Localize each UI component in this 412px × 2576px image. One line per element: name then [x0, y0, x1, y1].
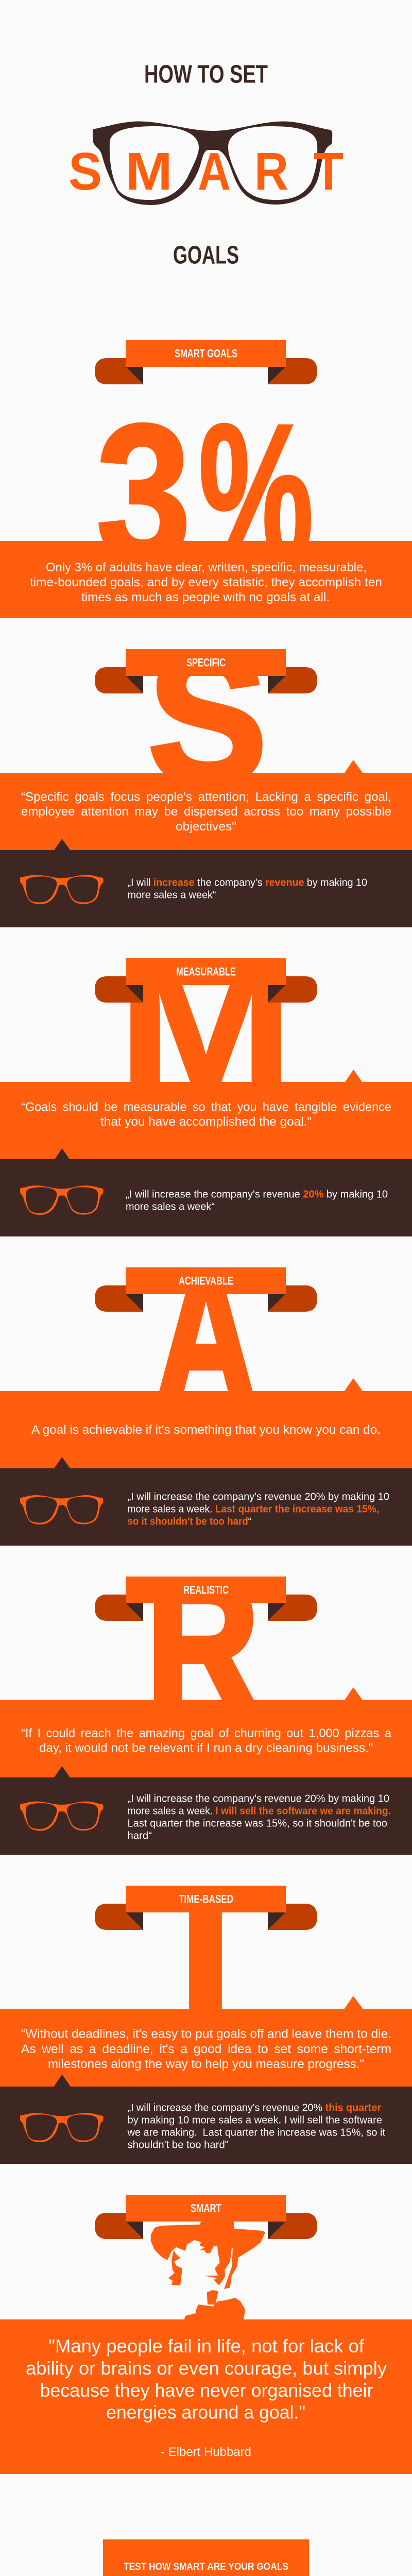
title: smart letters: A — [198, 142, 231, 201]
panel: specific quote — [0, 760, 412, 850]
section: time-based — [0, 1886, 412, 2164]
panel: realistic quote: “If I could reach the amazing goal of churning out 1,000 pizzas a — [21, 1726, 391, 1740]
panel: Hubbard quote — [0, 2319, 412, 2474]
panel: achievable example: „I will increase the company's revenue 20% by making 10 — [128, 1491, 389, 1502]
button: test how smart: TEST HOW SMART ARE YOUR GOALS — [124, 2561, 288, 2572]
section: smart goals 3 percent — [0, 340, 412, 618]
icon: large glasses — [93, 122, 332, 205]
panel: time-based example: shouldn't be too hard" — [128, 2139, 229, 2150]
panel: time-based quote: “Without deadlines, it's easy to put goals off and leave them to die. — [21, 2027, 391, 2041]
panel: realistic example: hard“ — [128, 1830, 152, 1841]
panel: measurable example: „I will increase the company's revenue 20% by making 10 — [126, 1188, 388, 1200]
ribbon: realistic — [95, 1577, 317, 1621]
title: smart letters — [68, 142, 344, 201]
panel: achievable quote: A goal is achievable if it's something that you know you can do. — [31, 1423, 381, 1437]
ribbon: specific: SPECIFIC — [186, 656, 226, 669]
panel: achievable example: more sales a week. Last quarter the increase was 15%, — [128, 1503, 379, 1515]
panel: Hubbard quote: ability or brains or even courage, but simply — [26, 2358, 387, 2379]
panel: statistic text — [0, 541, 412, 618]
ribbon: specific — [95, 649, 317, 693]
title: goals: GOALS — [173, 241, 239, 269]
panel: specific example — [0, 839, 412, 927]
title: how to set: HOW TO SET — [144, 61, 268, 89]
big statistic 3%: 3 — [96, 383, 191, 602]
ribbon: measurable: MEASURABLE — [176, 965, 236, 978]
panel: Hubbard quote: energies around a goal." — [106, 2402, 305, 2422]
section: achievable — [0, 1267, 412, 1546]
ribbon: time-based — [95, 1886, 317, 1930]
footer — [103, 2539, 309, 2576]
panel: time-based example: „I will increase the company's revenue 20% this quarter — [128, 2102, 381, 2113]
panel: specific example: more sales a week“ — [128, 889, 216, 901]
ribbon: smart goals — [95, 340, 317, 384]
panel: specific quote: “Specific goals focus people's attention; Lacking a specific goal, — [21, 790, 391, 804]
panel: realistic example: more sales a week. I will sell the software we are making. — [128, 1805, 391, 1817]
panel: specific quote: objectives" — [176, 820, 236, 834]
section: measurable — [0, 958, 412, 1236]
title: smart letters: T — [314, 142, 344, 201]
ribbon: achievable: ACHIEVABLE — [179, 1275, 233, 1287]
panel: achievable example — [0, 1457, 412, 1546]
title: smart letters: M — [125, 142, 173, 201]
panel: realistic example: Last quarter the increase was 15%, so it shouldn't be too — [128, 1818, 387, 1829]
panel: statistic text: time-bounded goals, and by every statistic, they accomplish ten — [30, 575, 382, 589]
panel: Hubbard quote: "Many people fail in life, not for lack of — [48, 2335, 365, 2357]
section: smart quote — [0, 2195, 412, 2474]
panel: time-based quote: As well as a deadline, it's a good idea to set some short-term — [21, 2042, 391, 2056]
panel: achievable example: so it shouldn't be too hard“ — [128, 1516, 251, 1527]
panel: specific example: „I will increase the company's revenue by making 10 — [128, 877, 367, 888]
big statistic 3%: % — [199, 383, 314, 602]
illustration: Elbert Hubbard silhouette — [151, 2215, 265, 2321]
ribbon: smart: SMART — [191, 2202, 221, 2214]
panel: time-based example — [0, 2074, 412, 2164]
panel: time-based example: by making 10 more sales a week. I will sell the software — [128, 2114, 382, 2126]
panel: achievable quote — [0, 1378, 412, 1468]
panel: measurable quote: “Goals should be measurable so that you have tangible evidence — [21, 1100, 391, 1114]
ribbon: measurable — [95, 958, 317, 1003]
panel: time-based example: we are making. Last quarter the increase was 15%, so it — [127, 2127, 385, 2138]
ribbon: smart — [95, 2195, 317, 2239]
big statistic 3% — [96, 383, 314, 602]
panel: measurable quote — [0, 1070, 412, 1159]
panel: Hubbard quote: - Elbert Hubbard — [161, 2445, 251, 2459]
section: specific — [0, 649, 412, 927]
panel: measurable quote: that you have accomplished the goal." — [100, 1115, 312, 1129]
panel: realistic quote: day, it would not be relevant if I run a dry cleaning business." — [39, 1741, 373, 1755]
panel: measurable example — [0, 1148, 412, 1236]
panel: specific quote: employee attention may be dispersed across too many possible — [21, 805, 391, 819]
panel: statistic text: Only 3% of adults have clear, written, specific, measurable, — [46, 561, 367, 574]
title: smart letters: R — [254, 142, 288, 201]
ribbon: time-based: TIME-BASED — [179, 1893, 233, 1905]
panel: realistic example: „I will increase the company's revenue 20% by making 10 — [128, 1793, 389, 1804]
panel: time-based quote: milestones along the way to help you measure progress." — [48, 2057, 364, 2071]
ribbon: achievable — [95, 1267, 317, 1312]
ribbon: smart goals: SMART GOALS — [175, 347, 237, 360]
panel: measurable example: more sales a week“ — [126, 1200, 215, 1213]
button: test how smart — [103, 2539, 309, 2576]
panel: time-based quote — [0, 1996, 412, 2087]
panel: realistic quote — [0, 1687, 412, 1777]
panel: statistic text: times as much as people with no goals at all. — [81, 590, 330, 604]
title block — [68, 61, 344, 269]
ribbon: realistic: REALISTIC — [183, 1584, 229, 1596]
panel: Hubbard quote: because they have never organised their — [40, 2380, 373, 2401]
title: smart letters: S — [68, 142, 102, 201]
section: realistic — [0, 1577, 412, 1855]
panel: realistic example — [0, 1766, 412, 1855]
